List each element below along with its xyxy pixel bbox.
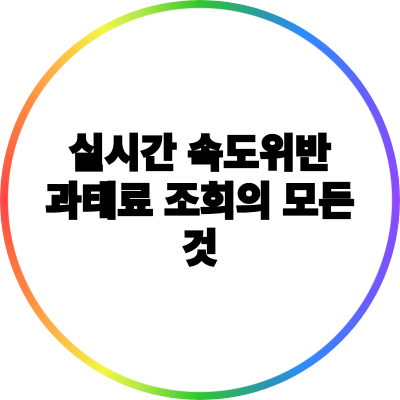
title	[46, 132, 354, 271]
title: 것	[182, 228, 218, 271]
title: 과태료 조회의 모든	[46, 180, 354, 224]
title: 실시간 속도위반	[69, 133, 331, 176]
